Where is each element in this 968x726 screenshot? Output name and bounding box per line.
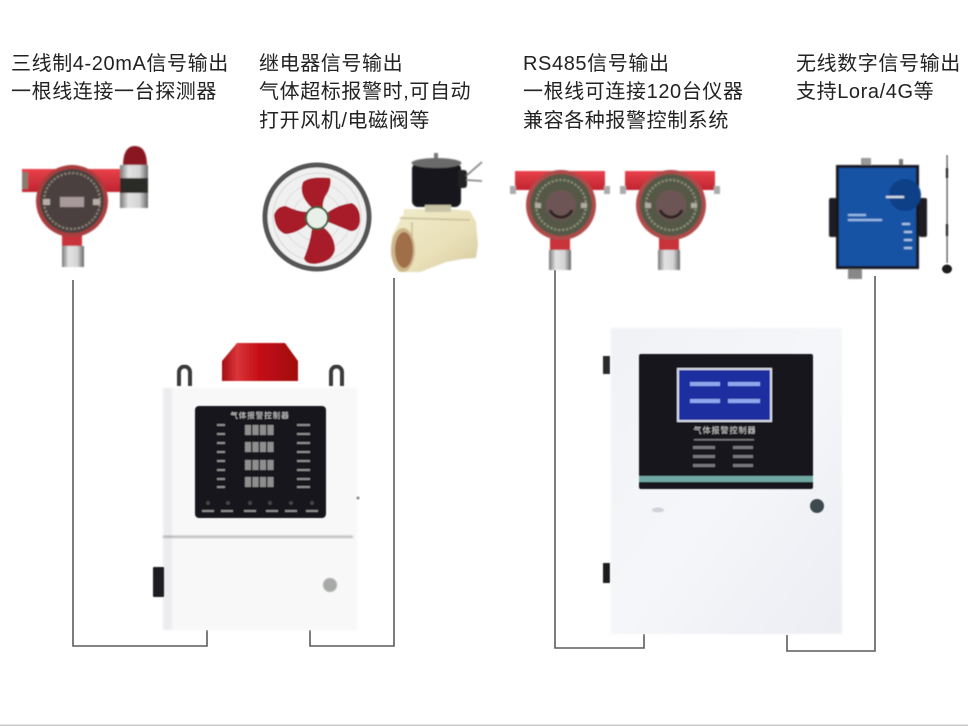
caption: RS485 output: RS485信号输出 (523, 52, 670, 74)
controller housing (163, 388, 357, 630)
caption: relay output: 继电器信号输出 (259, 52, 403, 74)
icon: hinges (603, 356, 610, 583)
caption: RS485 output: 一根线可连接120台仪器 (523, 81, 744, 103)
caption: relay output: 打开风机/电磁阀等 (259, 110, 430, 132)
caption: relay output: 气体超标报警时,可自动 (259, 81, 471, 103)
panel: wall-mounted alarm controller (153, 343, 360, 630)
wiring: gateway to cabinet (787, 276, 875, 651)
caption: wireless output (796, 52, 961, 103)
icon: red beacon (222, 343, 298, 381)
icon: axial fan (265, 165, 369, 269)
panel: alarm control cabinet (603, 328, 842, 634)
icon: RS485 gas detector 1 (510, 170, 610, 270)
icon: side knob (153, 567, 164, 597)
icon: RS485 gas detector 2 (620, 170, 720, 270)
panel title: 气体报警控制器 (230, 410, 290, 420)
bottom edge line (0, 724, 968, 726)
icon: cabinet button (810, 499, 824, 513)
wiring: left detector to controller (73, 280, 207, 646)
caption: 4-20mA output: 三线制4-20mA信号输出 (11, 52, 229, 74)
caption: relay output (259, 52, 471, 132)
wiring: valve to controller (310, 278, 394, 646)
wiring: RS485 detector to cabinet (555, 270, 644, 648)
icon: cabinet logo (652, 508, 664, 512)
display panel (195, 406, 326, 518)
cabinet title: 气体报警控制器 (694, 425, 756, 435)
icon: lock (323, 578, 337, 592)
icon: solenoid valve (391, 153, 482, 272)
caption: wireless output: 无线数字信号输出 (796, 52, 961, 74)
icon: mounting hooks (179, 367, 342, 386)
cabinet housing (611, 328, 842, 634)
icon: wireless gateway (829, 158, 927, 279)
caption: 4-20mA output: 一根线连接一台探测器 (11, 81, 217, 103)
digit readouts (245, 425, 274, 487)
icon: antenna (942, 155, 952, 274)
LCD screen (678, 369, 771, 421)
cabinet display panel (639, 354, 813, 489)
caption: 4-20mA output (11, 52, 229, 103)
icon: gas detector with beacon (22, 146, 148, 267)
caption: RS485 output: 兼容各种报警控制系统 (523, 110, 729, 132)
caption: RS485 output (523, 52, 744, 132)
caption: wireless output: 支持Lora/4G等 (796, 81, 934, 103)
